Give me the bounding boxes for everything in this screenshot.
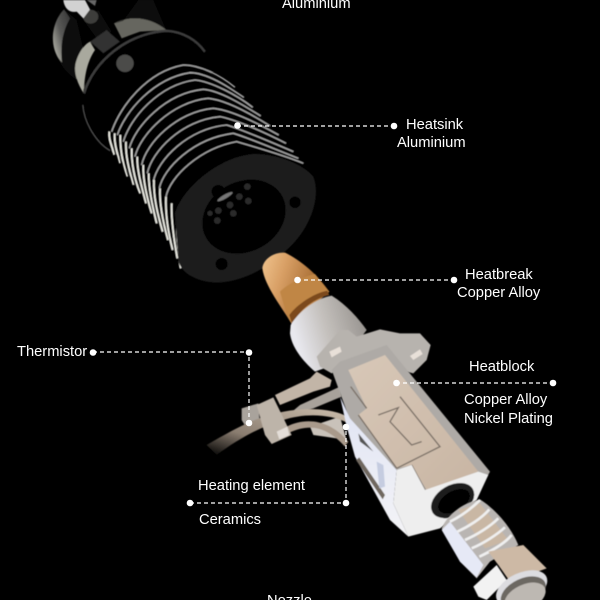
label: heatsink: Heatsink (406, 117, 464, 133)
nozzle hex (488, 545, 547, 582)
label: heating element: Ceramics (199, 512, 261, 528)
label: heatblock: Nickel Plating (464, 411, 553, 427)
label: heatsink (397, 117, 466, 151)
heatsink illustration (53, 0, 316, 283)
label: heatbreak: Heatbreak (465, 267, 533, 283)
clip post (242, 403, 260, 428)
label: heatbreak (457, 267, 541, 301)
flange (83, 31, 215, 157)
label: heating element: Heating element (198, 478, 305, 494)
bore holes (207, 183, 252, 224)
nozzle illustration (442, 499, 553, 600)
cooling fins (108, 65, 305, 270)
mounting screw (116, 55, 134, 72)
flange slots (329, 347, 342, 357)
cable clip (257, 397, 292, 444)
heatbreak barrel (290, 296, 367, 372)
nozzle collar (490, 563, 553, 600)
block top surface (332, 345, 490, 497)
screw holes (289, 197, 301, 208)
label: heatbreak: Copper Alloy (457, 285, 541, 301)
hotend upper illustration (207, 253, 431, 455)
side face (340, 397, 408, 537)
heatsink end face (175, 154, 316, 283)
central bore (189, 165, 299, 268)
label: heatblock (464, 359, 553, 427)
cable bracket (275, 372, 332, 405)
label: heating element (198, 478, 305, 528)
heatblock illustration (332, 345, 490, 537)
leader lines (93, 126, 553, 503)
top collar (53, 0, 167, 94)
label: heatblock: Copper Alloy (464, 392, 548, 408)
label: thermistor: Thermistor (17, 344, 87, 360)
leader dots (90, 122, 556, 506)
fin side highlights (109, 132, 181, 268)
plate grooves (351, 387, 440, 490)
nozzle thread (442, 499, 518, 578)
cables (207, 409, 350, 455)
side slots (356, 457, 385, 499)
bore face (393, 465, 488, 537)
heatblock flange (317, 329, 431, 373)
heatbreak copper tip (262, 253, 329, 324)
label: heatblock: Heatblock (469, 359, 535, 375)
threaded bore (425, 476, 481, 526)
label: heatsink: Aluminium (397, 135, 466, 151)
tan top plate (348, 355, 478, 490)
